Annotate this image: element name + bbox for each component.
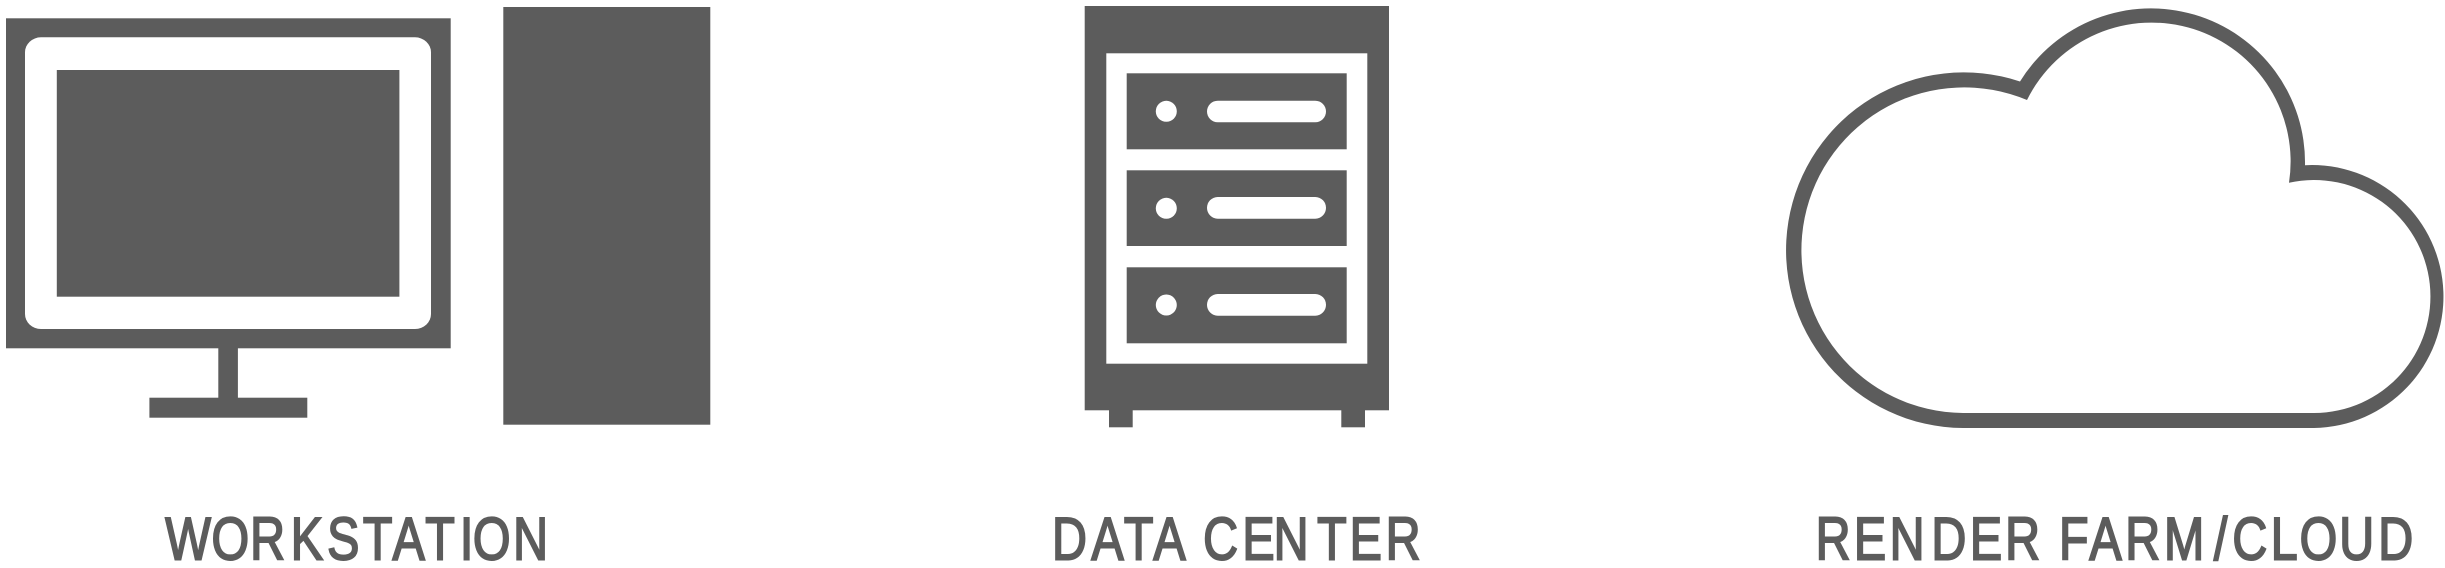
icon: computer tower (503, 7, 710, 425)
panel: data center (1052, 6, 1421, 568)
panel: workstation (6, 7, 710, 568)
icon: server rack (1085, 6, 1389, 427)
icon: cloud (1786, 8, 2443, 428)
panel: render farm / cloud (1786, 8, 2443, 568)
icon: monitor (6, 18, 451, 418)
